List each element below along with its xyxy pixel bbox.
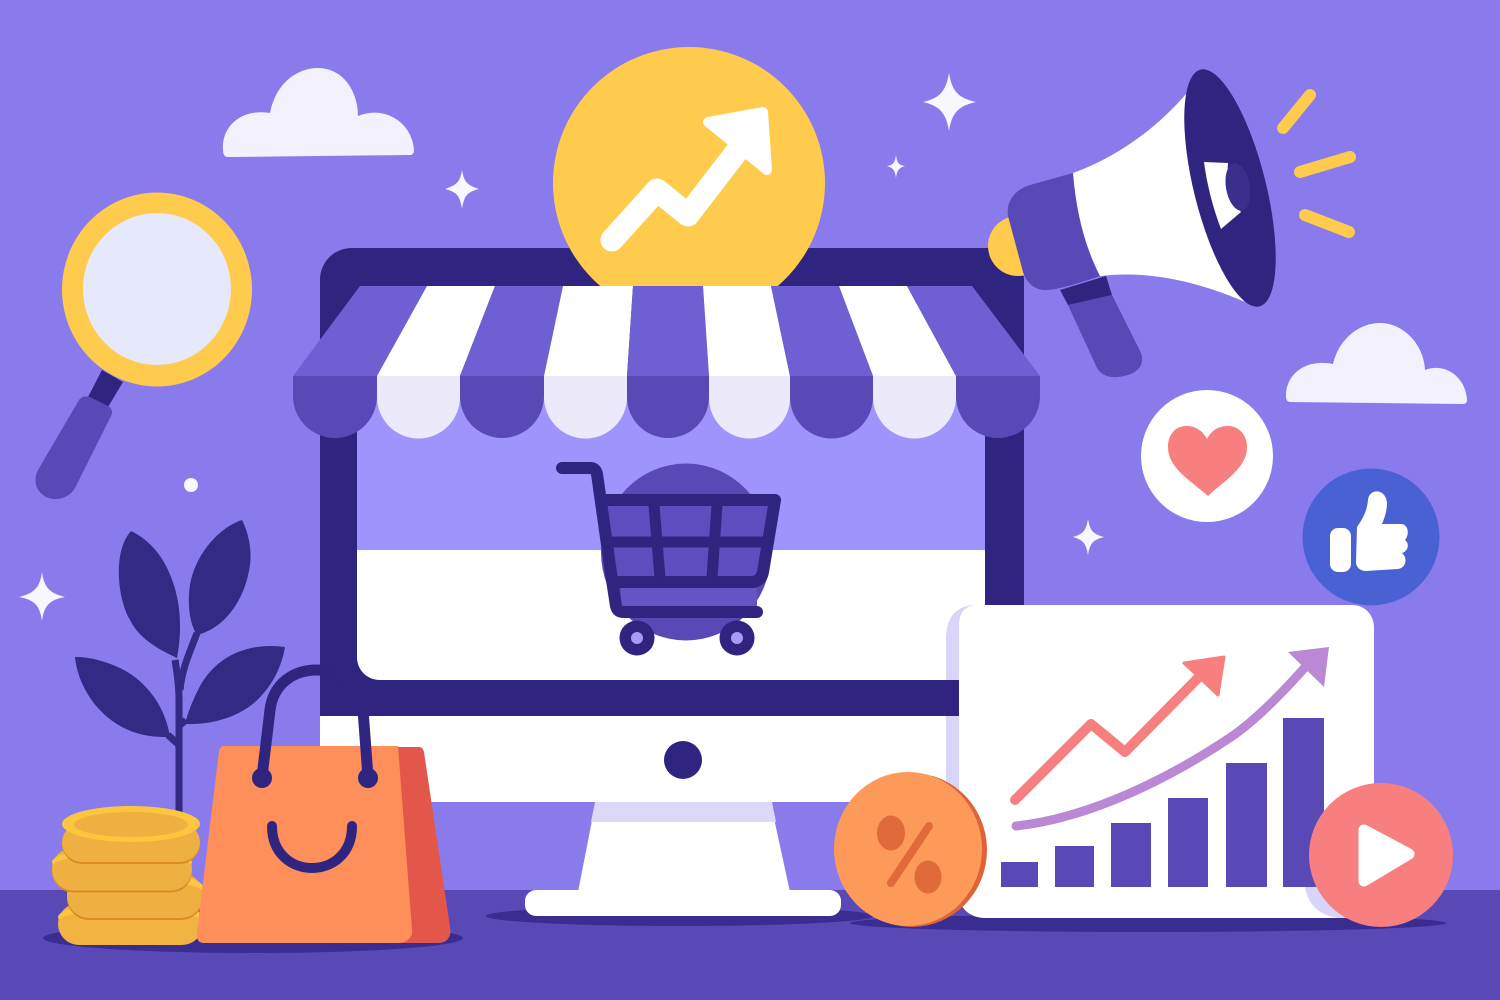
- icon: yellow growth coin: [553, 47, 825, 286]
- icon: megaphone: [988, 61, 1350, 377]
- chart panel: [940, 605, 1374, 918]
- monitor stand: [578, 800, 790, 892]
- icon: thumbs up badge: [1302, 468, 1440, 606]
- power button: [664, 741, 702, 779]
- screen: [357, 376, 985, 680]
- megaphone sound lines: [1283, 95, 1350, 232]
- monitor frame: [320, 248, 1024, 716]
- icon: coin stack: [52, 806, 203, 945]
- panel back sheet: [946, 605, 975, 790]
- icon: shopping cart: [562, 464, 775, 656]
- coin 3: [67, 873, 203, 920]
- icon: play button: [1309, 783, 1453, 927]
- purple trend arrow: [1016, 664, 1308, 826]
- icon: magnifying glass: [35, 192, 252, 499]
- icon: plant: [75, 520, 285, 812]
- coin 1: [62, 823, 200, 864]
- cloud left: [223, 68, 414, 157]
- cloud right: [1286, 323, 1467, 404]
- monitor chin: [320, 716, 1024, 802]
- icon: shopping bag: [197, 670, 450, 943]
- sparkles: [19, 73, 1104, 621]
- floor shadows: [43, 906, 1446, 953]
- coral trend arrow: [1015, 678, 1198, 800]
- bars: [1001, 718, 1324, 887]
- icon: heart badge: [1141, 390, 1273, 522]
- icon: percent coin: [834, 772, 987, 927]
- awning scallops: [293, 376, 377, 438]
- coin 4: [58, 903, 203, 945]
- coin 2: [52, 848, 192, 892]
- monitor: [320, 248, 1024, 916]
- arrow up: [612, 150, 738, 240]
- awning: [293, 286, 1040, 438]
- floor: [0, 890, 1500, 1000]
